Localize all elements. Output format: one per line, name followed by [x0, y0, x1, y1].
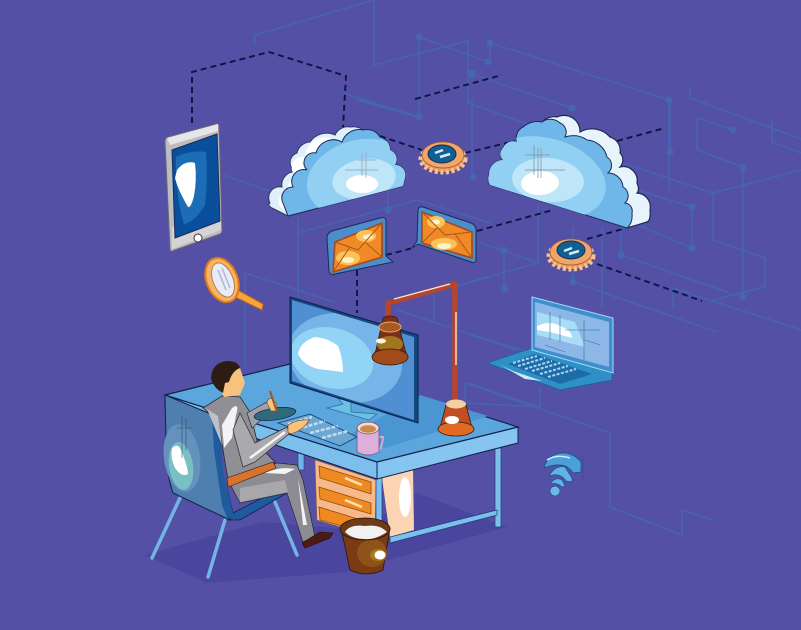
lamp head [373, 316, 408, 358]
computer monitor [278, 297, 418, 423]
desk [165, 360, 518, 543]
desk top [165, 360, 518, 462]
man hand and mouse [253, 405, 297, 423]
floor shadow [145, 493, 507, 583]
chair legs [152, 498, 297, 577]
desk right leg and rail [495, 448, 501, 527]
icon: wifi [544, 453, 583, 496]
monitor stand [327, 397, 377, 420]
coffee mug [357, 422, 383, 455]
desk cabinet side [382, 470, 414, 537]
icon: gear right [549, 239, 593, 269]
dashed connector lines [192, 52, 702, 313]
man torso [203, 396, 275, 480]
icon: magnifying glass [199, 253, 263, 310]
desk back leg [298, 450, 304, 470]
icon: smartphone [165, 124, 222, 251]
man shoe [302, 532, 333, 548]
man arm right [233, 413, 290, 467]
lamp base [440, 401, 472, 428]
cloud: left [268, 126, 406, 217]
icon: envelope right [412, 207, 476, 263]
man legs [228, 463, 315, 542]
cushion belt [227, 462, 276, 487]
desk lamp [372, 284, 474, 436]
chair seat [222, 487, 287, 520]
keyboard [278, 414, 357, 446]
icon: laptop [487, 297, 613, 390]
icon: gear left [421, 142, 465, 172]
desk drawers [315, 460, 376, 537]
waste bin [340, 518, 390, 574]
cloud: right [475, 115, 650, 233]
man arm left [247, 402, 272, 428]
office chair [152, 395, 297, 577]
man head [218, 367, 245, 397]
desk side face [165, 395, 377, 479]
desk front leg [376, 478, 382, 538]
icon: envelope left [327, 218, 393, 275]
lamp arm [388, 284, 455, 401]
seated man [203, 361, 333, 548]
circuit board background [223, 0, 801, 535]
chair back [165, 395, 230, 520]
